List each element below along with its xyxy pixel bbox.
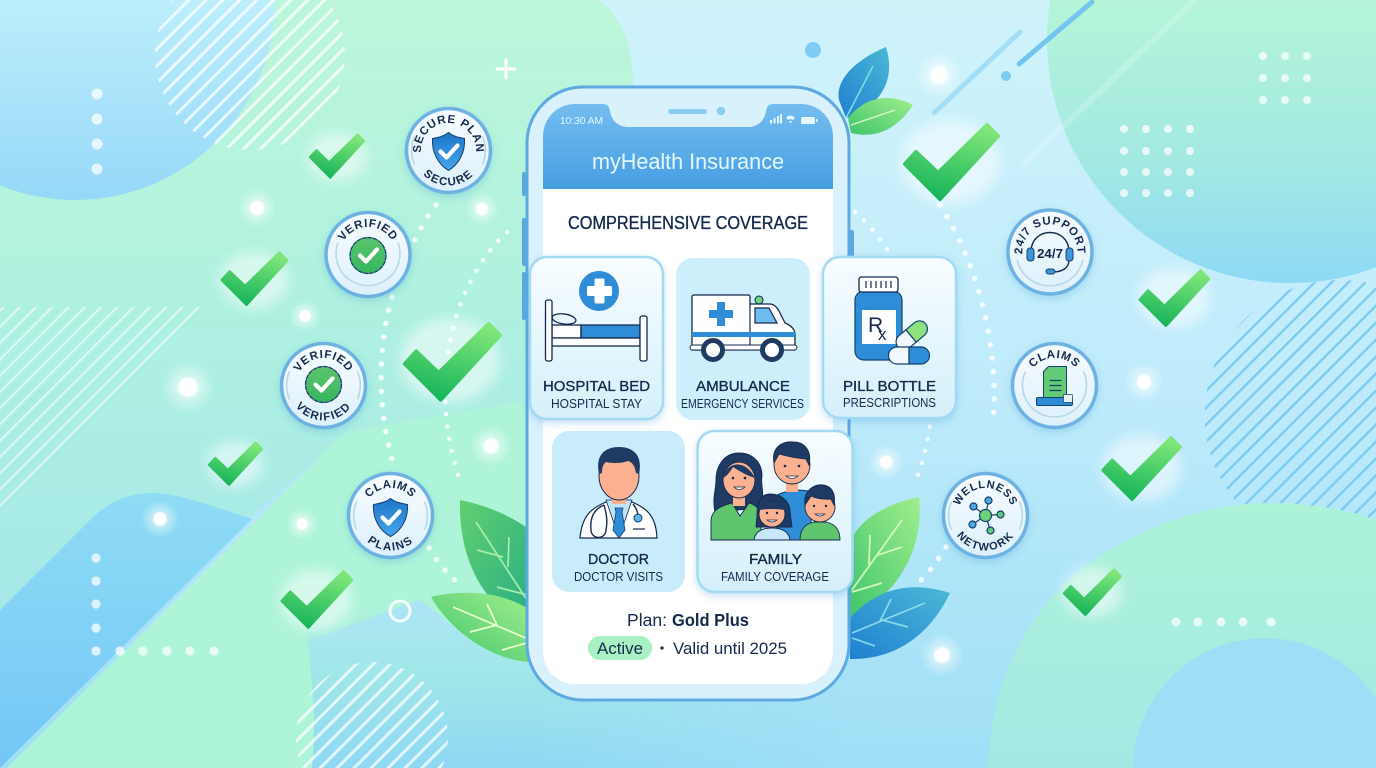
check mark 1 <box>905 125 998 199</box>
badge: verified: VERIFIED <box>337 218 397 239</box>
mother <box>711 453 763 540</box>
icon: claim document <box>1036 366 1072 406</box>
stripes: lower circle <box>296 662 448 768</box>
check mark 5 <box>209 443 262 485</box>
badge: secure plan: SECURE PLAN <box>413 114 484 152</box>
card: pill bottle <box>823 257 956 418</box>
icon: network nodes <box>969 497 1004 534</box>
speaker and camera <box>668 107 725 115</box>
badge: claims: CLAIMS <box>1029 350 1080 366</box>
badge: claims <box>1007 341 1102 436</box>
badge: 24/7 support <box>1002 208 1098 302</box>
heading: COMPREHENSIVE COVERAGE <box>568 213 808 233</box>
background: bottom-right blue circle <box>1133 638 1376 768</box>
phone screen <box>543 104 833 684</box>
sublabel: DOCTOR VISITS <box>574 570 663 584</box>
background: top-left blue circle <box>0 0 275 200</box>
glow sparkles <box>141 51 1164 677</box>
boy <box>800 485 840 540</box>
check marks <box>209 125 1209 627</box>
sublabel: HOSPITAL STAY <box>551 397 643 411</box>
leaf: top green <box>848 98 913 135</box>
card: ambulance <box>676 258 810 420</box>
plan label <box>627 610 749 630</box>
badge: verified verified: VERIFIED <box>292 350 352 370</box>
leaf: left light green <box>431 593 530 662</box>
icon: green seal <box>306 366 342 402</box>
background: lower-left blue shape <box>0 493 252 768</box>
card: doctor <box>552 431 685 592</box>
badge: verified verified: VERIFIED <box>297 401 349 421</box>
label: DOCTOR <box>588 551 649 568</box>
label: HOSPITAL BED <box>543 378 650 395</box>
check halos <box>207 120 1210 630</box>
validity text: Valid until 2025 <box>673 640 787 658</box>
check mark 9 <box>1064 570 1121 615</box>
white dot clusters <box>91 52 1311 656</box>
icon: pill bottle <box>855 277 902 360</box>
icon: shield <box>373 498 408 536</box>
background: top-right circle <box>1047 0 1376 283</box>
app title: myHealth Insurance <box>592 149 784 174</box>
stripes: top-left circle <box>155 0 345 150</box>
sublabel: FAMILY COVERAGE <box>721 570 829 584</box>
check mark 3 <box>310 135 364 178</box>
phone side buttons <box>522 172 854 320</box>
check mark 8 <box>1103 438 1180 499</box>
phone body <box>527 87 849 700</box>
icon: headset: 24/7 <box>1037 246 1063 261</box>
badge: verified verified <box>278 342 370 434</box>
notch fill <box>604 104 772 127</box>
badge: wellness network: WELLNESS <box>952 480 1017 504</box>
father <box>774 442 813 540</box>
leaves behind the phone <box>431 47 950 662</box>
badge: verified <box>322 210 414 304</box>
sublabel: EMERGENCY SERVICES <box>681 397 804 411</box>
badge: wellness network <box>940 471 1032 564</box>
faces <box>732 465 827 514</box>
badge: secure plan: SECURE <box>424 170 472 186</box>
leaf: right light green <box>848 497 920 618</box>
plan label: Gold Plus <box>672 610 749 630</box>
icon: capsules <box>888 318 931 364</box>
badge: wellness network: NETWORK <box>957 531 1014 550</box>
dotted arcs <box>381 205 994 581</box>
icon: doctor <box>580 447 657 538</box>
label: PILL BOTTLE <box>843 378 936 395</box>
background: top-left green shape <box>0 0 633 610</box>
leaf: left dark green <box>460 500 530 622</box>
leaf: top blue <box>838 47 889 118</box>
leaf: right blue <box>850 587 950 659</box>
check mark 2 <box>405 324 500 400</box>
stripes: right circle <box>1205 280 1376 550</box>
plan label: Plan: <box>627 610 667 630</box>
status bar time: 10:30 AM <box>560 115 603 127</box>
phone <box>522 87 956 700</box>
icon: medical cross circle <box>579 271 619 311</box>
background: lower-left green shape <box>7 400 530 768</box>
check mark 4 <box>222 253 287 304</box>
icon: bed <box>546 300 647 361</box>
top-right diagonal lines <box>934 2 1193 163</box>
icon: pill bottle: x <box>878 325 887 344</box>
label: FAMILY <box>749 551 802 568</box>
icon: green seal <box>350 238 386 274</box>
stripes: left corner <box>0 307 205 512</box>
badge: claims plains <box>344 472 436 564</box>
badge: secure plan <box>401 106 496 200</box>
check mark 6 <box>282 572 352 627</box>
check mark 7 <box>1140 271 1209 326</box>
icon: shield <box>432 132 465 170</box>
active status pill <box>588 636 652 660</box>
icon: family <box>711 442 840 540</box>
card: hospital bed <box>530 257 663 419</box>
background: lower-centre blue area <box>308 626 689 768</box>
badge: claims plains: CLAIMS <box>365 480 416 496</box>
badge: 24/7 support: 24/7 SUPPORT <box>1014 216 1086 254</box>
smiles <box>734 476 825 522</box>
icon: ambulance <box>690 295 797 360</box>
decorative blue dots <box>805 42 1011 81</box>
active status pill: Active <box>597 640 643 658</box>
background: bottom-right green circle <box>988 503 1376 768</box>
status bar icons <box>770 114 818 124</box>
plus sparkle <box>497 60 515 78</box>
card: family <box>698 431 852 592</box>
sublabel: PRESCRIPTIONS <box>843 396 936 410</box>
ring <box>390 601 410 621</box>
app header <box>543 104 833 189</box>
icon: pill bottle: R <box>868 314 883 337</box>
label: AMBULANCE <box>696 378 790 395</box>
girl <box>754 494 792 540</box>
badge: claims plains: PLAINS <box>368 536 412 550</box>
